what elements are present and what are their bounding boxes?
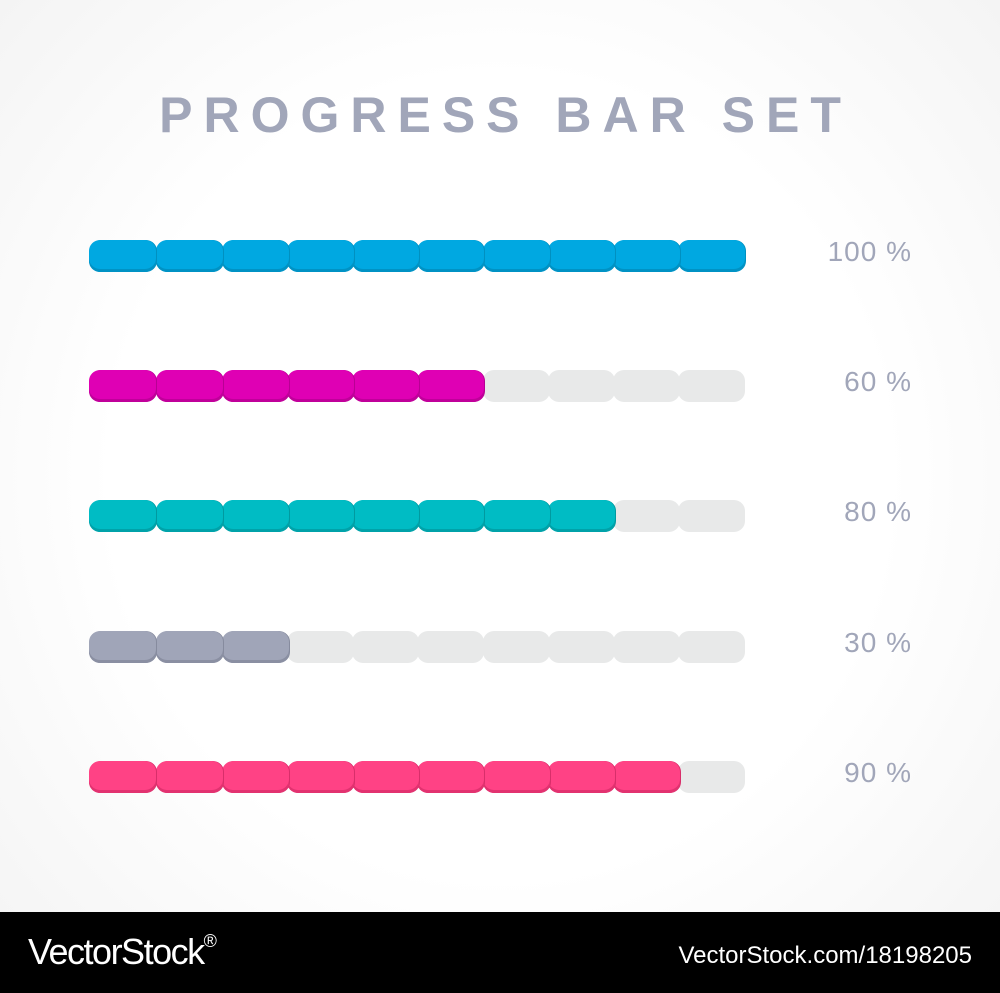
footer url: VectorStock.com/18198205 bbox=[678, 942, 972, 969]
bar: 30% gray bbox=[89, 631, 745, 663]
bar: 100% blue bbox=[89, 240, 746, 272]
label: 100%: 100 % bbox=[828, 236, 912, 267]
title: PROGRESS BAR SET bbox=[159, 87, 852, 143]
footer bbox=[0, 912, 1000, 993]
footer logo text: VectorStock® bbox=[28, 931, 215, 972]
label: 80%: 80 % bbox=[844, 496, 912, 527]
label: 60%: 60 % bbox=[844, 366, 912, 397]
bar: 60% magenta bbox=[89, 370, 745, 402]
bar: 90% pink bbox=[89, 761, 745, 793]
label: 30%: 30 % bbox=[844, 627, 912, 658]
bar: 80% teal bbox=[89, 500, 745, 532]
label: 90%: 90 % bbox=[844, 757, 912, 788]
